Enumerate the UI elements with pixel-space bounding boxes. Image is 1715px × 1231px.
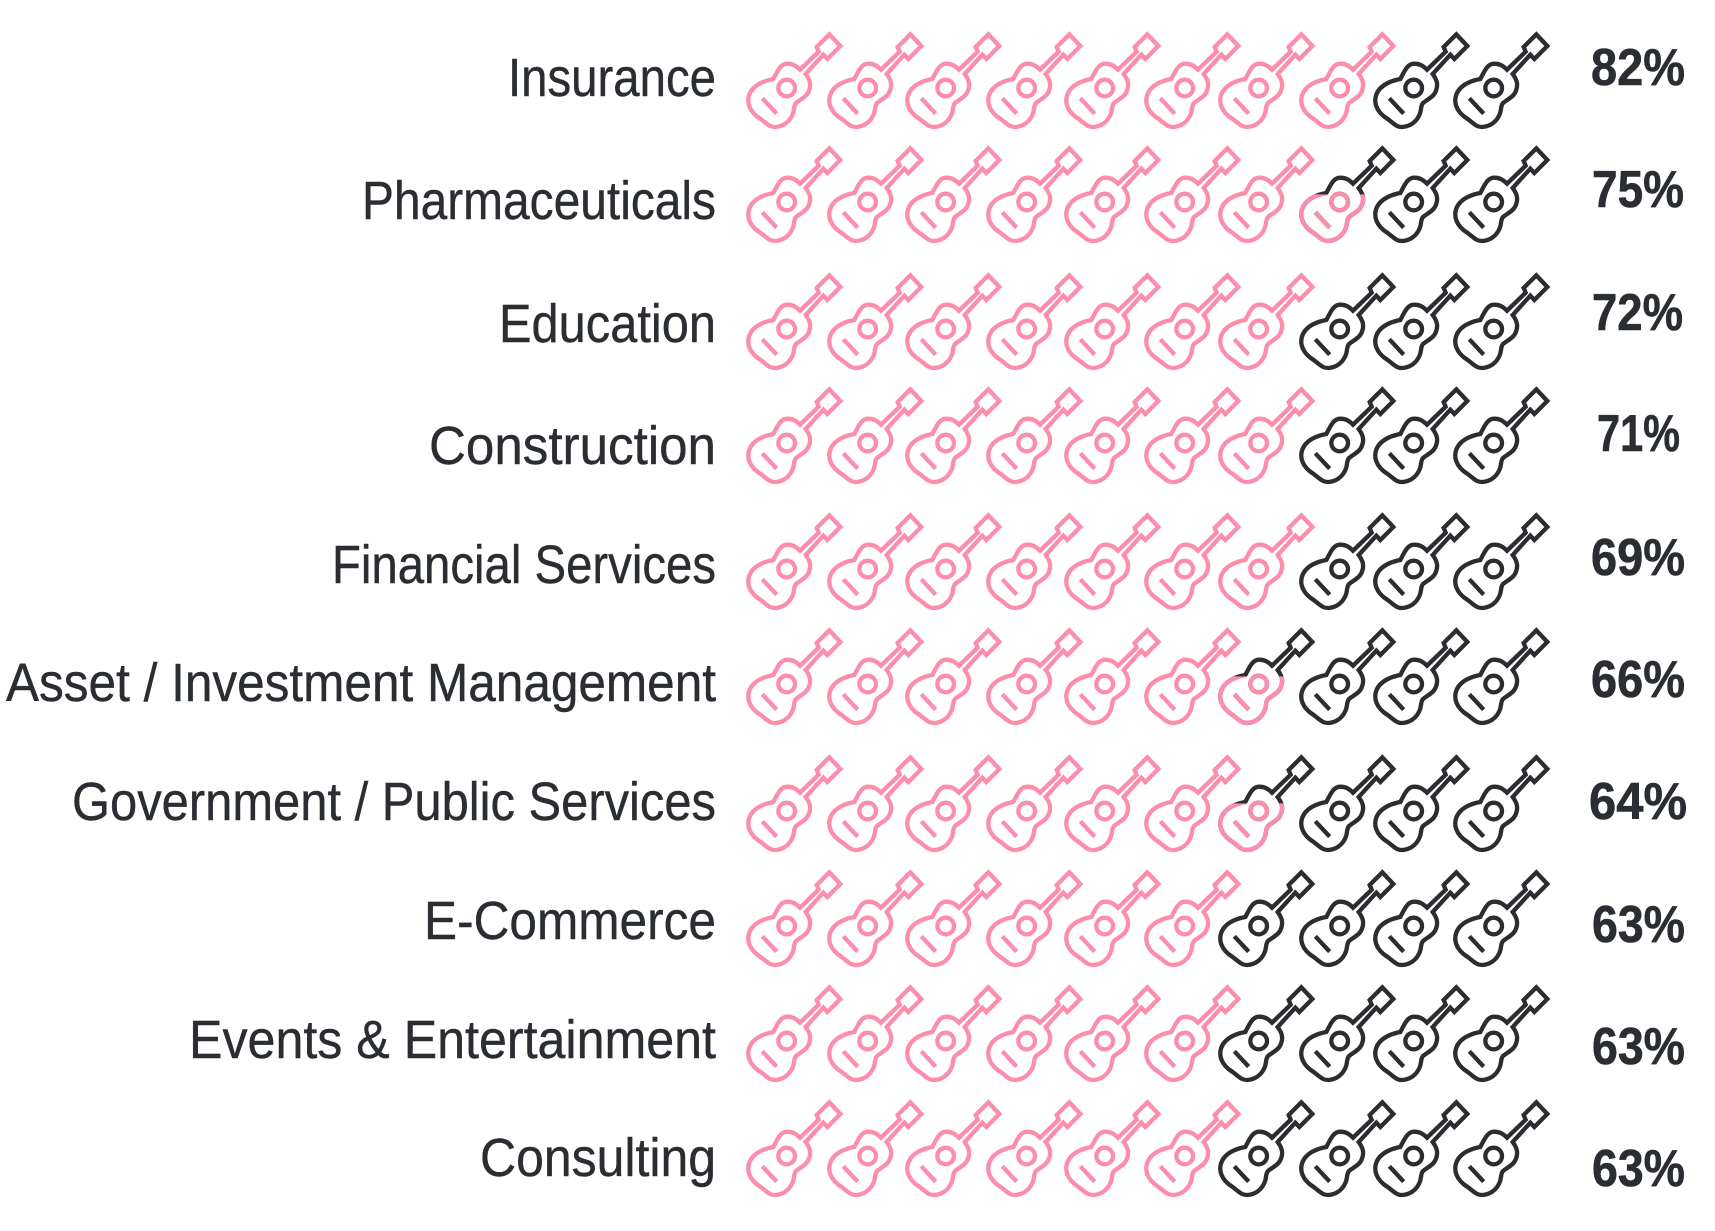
value: 72%: 72% — [1592, 284, 1683, 342]
label: Education: Education — [499, 294, 716, 354]
value: 69%: 69% — [1591, 529, 1685, 587]
pictogram: 69% guitars — [748, 515, 1547, 608]
row: Consulting — [480, 1102, 1685, 1198]
pictogram: 64% guitars — [748, 757, 1547, 850]
value: 82%: 82% — [1591, 39, 1685, 97]
pictogram: 66% guitars — [748, 630, 1547, 723]
label: Financial Services: Financial Services — [332, 535, 716, 595]
value: 71%: 71% — [1597, 405, 1680, 463]
row: Asset / Investment Management — [6, 630, 1685, 723]
row: Financial Services — [332, 515, 1685, 608]
row: E-Commerce — [424, 872, 1685, 965]
label: Asset / Investment Management: Asset / Investment Management — [6, 653, 716, 713]
row: Government / Public Services — [72, 757, 1687, 850]
pictogram: 75% guitars — [748, 148, 1547, 241]
value: 66%: 66% — [1591, 651, 1685, 709]
value: 75%: 75% — [1592, 161, 1684, 219]
pictogram: 82% guitars — [748, 34, 1547, 127]
value: 63%: 63% — [1592, 1018, 1685, 1076]
row: Construction — [429, 389, 1680, 482]
label: E-Commerce: E-Commerce — [424, 891, 716, 951]
label: Consulting: Consulting — [480, 1128, 716, 1188]
row: Events & Entertainment — [189, 987, 1685, 1080]
label: Insurance: Insurance — [508, 48, 716, 108]
label: Pharmaceuticals: Pharmaceuticals — [362, 171, 716, 231]
row: Insurance — [508, 34, 1685, 127]
value: 63%: 63% — [1592, 896, 1685, 954]
row: Pharmaceuticals — [362, 148, 1684, 241]
row: Education — [499, 275, 1683, 368]
pictogram: 63% guitars — [748, 987, 1547, 1080]
label: Construction: Construction — [429, 416, 716, 476]
label: Events & Entertainment: Events & Entertainment — [189, 1010, 716, 1070]
pictogram: 63% guitars — [748, 1102, 1547, 1195]
label: Government / Public Services: Government / Public Services — [72, 772, 716, 832]
pictogram: 71% guitars — [748, 389, 1547, 482]
value: 64%: 64% — [1589, 773, 1687, 831]
pictogram: 72% guitars — [748, 275, 1547, 368]
pictogram: 63% guitars — [748, 872, 1547, 965]
value: 63%: 63% — [1592, 1140, 1685, 1198]
